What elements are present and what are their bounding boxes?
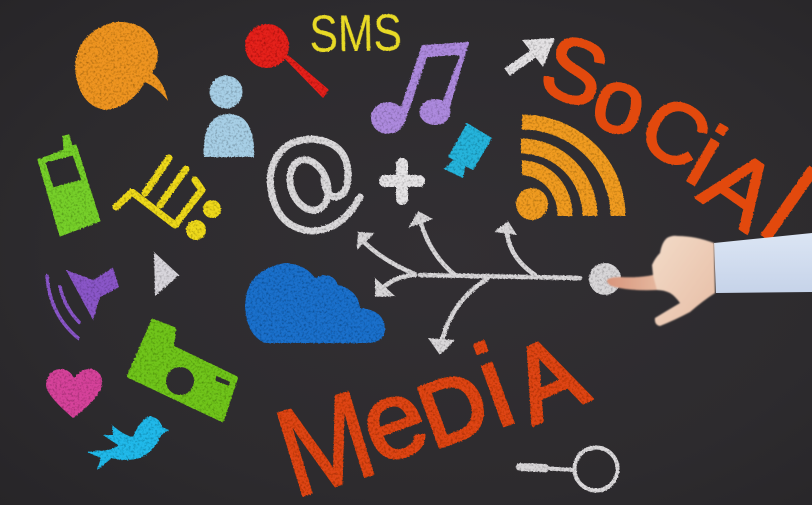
heading: Social: S [529, 15, 620, 129]
icon: arrow up-right [507, 38, 555, 72]
heading: SMS: SMS [309, 4, 402, 64]
icon: plus [385, 164, 419, 199]
heading: Media: D [406, 352, 501, 468]
icon: speech bubble [75, 22, 168, 110]
heading: Media [261, 313, 602, 505]
icon: speaker [47, 268, 119, 338]
icon: red map pin [245, 24, 328, 97]
heading: Social: C [624, 77, 725, 190]
icon: cloud [245, 263, 385, 343]
touch point dot [589, 263, 621, 295]
icon: RSS feed [516, 122, 618, 220]
arrow tree [357, 211, 580, 355]
heading: Media: e [343, 352, 443, 488]
heading: Social: A [683, 128, 797, 252]
sleeve [714, 233, 812, 293]
icon: video camera [444, 123, 492, 178]
icon: at sign [270, 139, 360, 231]
hand and sleeve [607, 233, 812, 326]
icon: photo camera [129, 321, 236, 420]
icon: shopping cart [116, 158, 221, 240]
hand pointing [607, 236, 715, 326]
heading: Media: i [459, 318, 530, 453]
heading: Social [529, 15, 812, 265]
heading: Media: A [495, 313, 602, 446]
icon: person [204, 76, 254, 157]
icon: magnifying glass [520, 448, 618, 490]
icon: music note [371, 42, 469, 134]
icon: mobile phone [38, 135, 100, 236]
heading: Social: i [672, 108, 740, 205]
icon: play triangle [154, 252, 179, 296]
heading: Social: o [583, 47, 657, 157]
icon: bird [87, 416, 169, 470]
icon: heart [46, 369, 102, 418]
